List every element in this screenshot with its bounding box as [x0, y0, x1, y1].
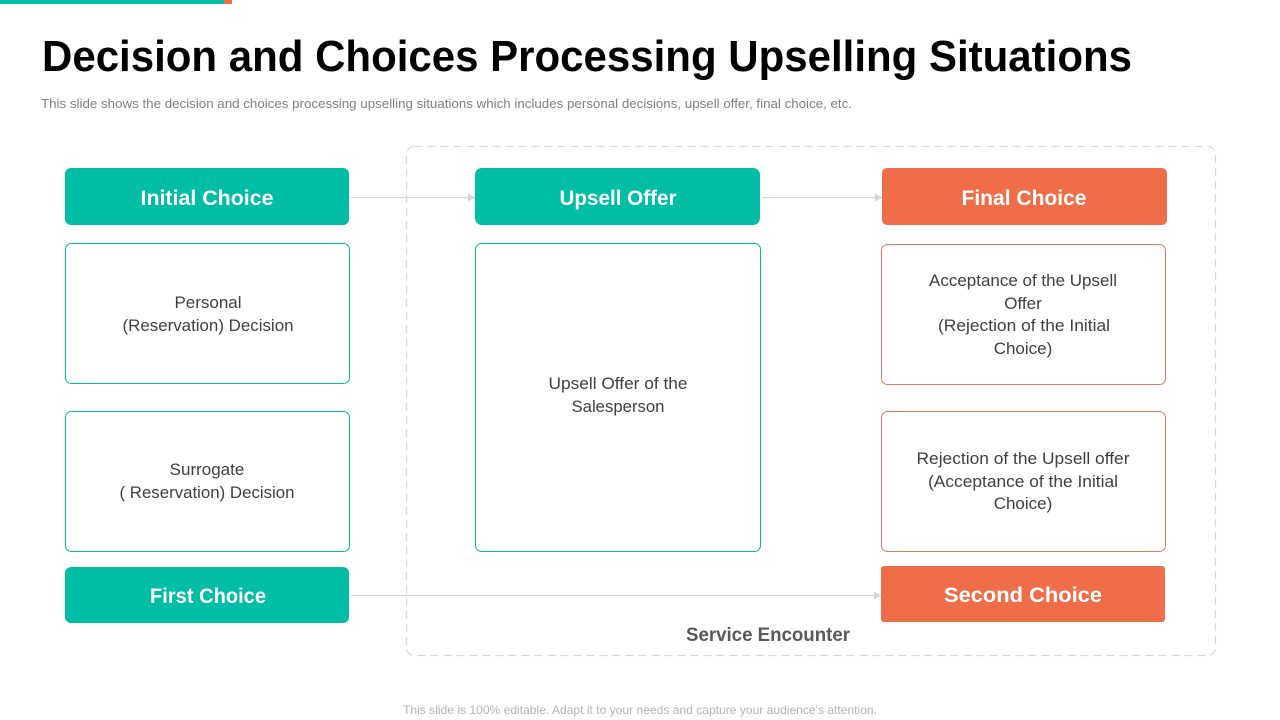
box: upsell offer of the salesperson: [476, 244, 760, 552]
label: service encounter: Service Encounter: [686, 625, 851, 646]
heading: final choice: Final Choice: [962, 187, 1086, 210]
heading: second choice: [881, 566, 1165, 622]
heading: upsell offer: [475, 168, 760, 225]
footer note: This slide is 100% editable. Adapt it to your needs and capture your audience's attention.: [403, 703, 877, 717]
subtitle: This slide shows the decision and choices processing upselling situations which includes personal decisions, upsell offer, final choice, etc.: [41, 96, 852, 111]
heading: initial choice: Initial Choice: [140, 187, 274, 210]
top accent bar: [0, 0, 232, 4]
arrow: initial choice to upsell offer: [351, 196, 475, 198]
box: rejection of the upsell offer: (Acceptance of the Initial: [928, 472, 1118, 491]
box: acceptance of the upsell offer: Acceptance of the Upsell: [929, 271, 1117, 290]
box: surrogate reservation decision: Surrogate: [170, 460, 244, 479]
box: surrogate reservation decision: ( Reservation) Decision: [120, 483, 294, 502]
box: upsell offer of the salesperson: Upsell Offer of the: [548, 374, 688, 393]
box: surrogate reservation decision: [66, 412, 350, 552]
title: Decision and Choices Processing Upselling Situations: [42, 32, 1132, 81]
heading: second choice: Second Choice: [944, 584, 1102, 607]
box: acceptance of the upsell offer: (Rejection of the Initial: [938, 316, 1110, 335]
box: rejection of the upsell offer: [882, 412, 1166, 552]
box: rejection of the upsell offer: Rejection of the Upsell offer: [916, 449, 1130, 468]
box: acceptance of the upsell offer: Choice): [994, 339, 1052, 358]
panel: service encounter dashed frame: [406, 146, 1216, 656]
box: personal reservation decision: Personal: [174, 293, 242, 312]
box: acceptance of the upsell offer: Offer: [1004, 294, 1042, 313]
arrow: upsell offer to final choice: [762, 196, 882, 198]
heading: final choice: [882, 168, 1167, 225]
box: rejection of the upsell offer: Choice): [994, 494, 1052, 513]
box: acceptance of the upsell offer: [882, 244, 1166, 384]
heading: first choice: [65, 567, 349, 623]
heading: first choice: First Choice: [150, 585, 266, 608]
heading: upsell offer: Upsell Offer: [560, 187, 676, 210]
arrow: first choice to second choice: [351, 594, 881, 596]
heading: initial choice: [65, 168, 349, 225]
box: upsell offer of the salesperson: Salesperson: [572, 397, 664, 416]
box: personal reservation decision: (Reservation) Decision: [122, 316, 294, 335]
box: personal reservation decision: [66, 244, 350, 384]
